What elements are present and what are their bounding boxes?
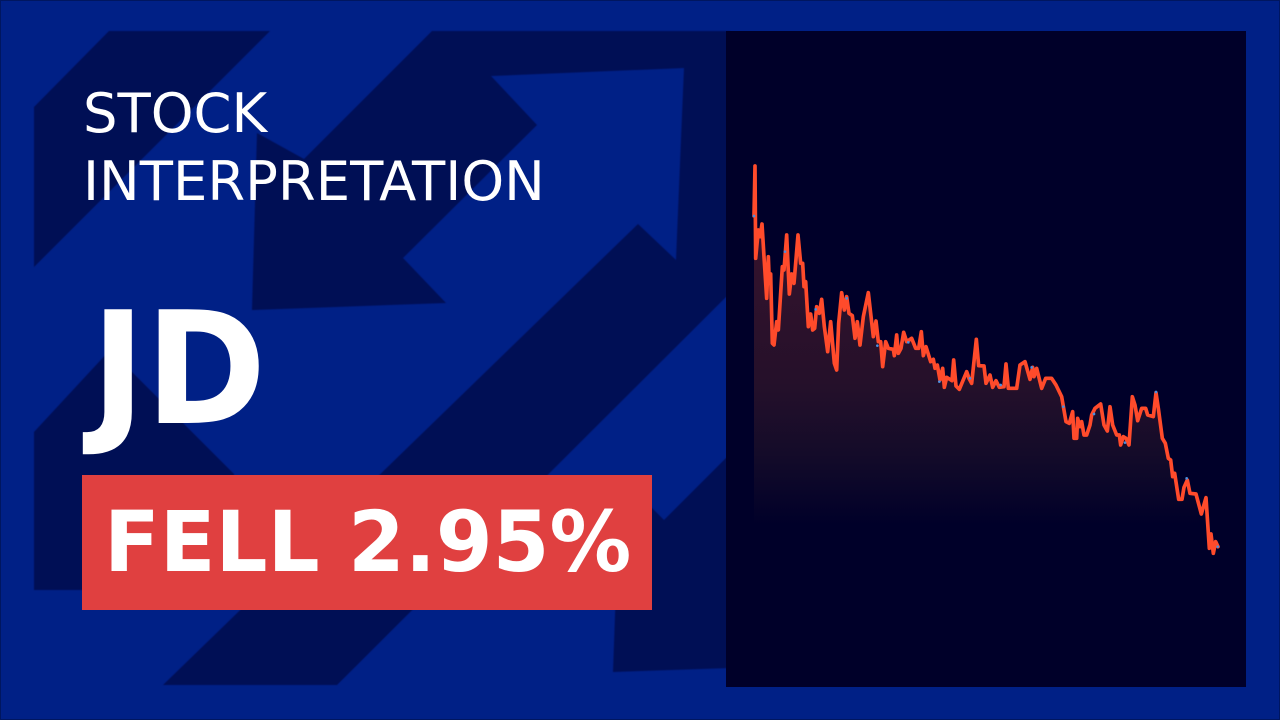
title: INTERPRETATION [83,150,545,213]
price change text: FELL 2.95% [104,493,631,591]
title [83,82,545,213]
sample point markers [753,215,1219,548]
ticker symbol: JD [91,278,266,460]
title: STOCK [83,82,267,145]
arrow: lower left fragment [34,350,234,590]
price line [754,166,1218,553]
panel: price chart [726,31,1246,687]
arrow: large central chevrons [163,31,730,685]
arrow: top left fragment [34,31,270,267]
callout: price change [82,475,652,610]
area fill under line [754,166,1218,583]
arrow: lower right fragment [613,454,730,672]
